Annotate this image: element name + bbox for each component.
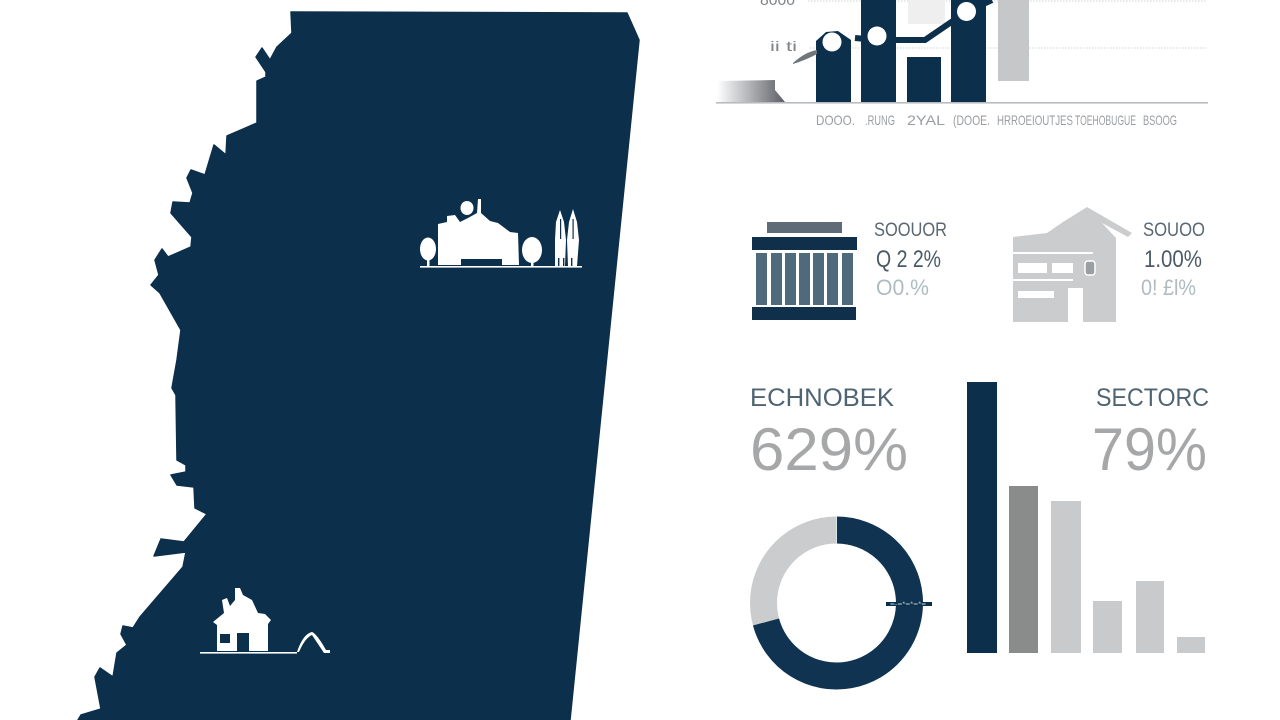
chart: top bar and line chart	[716, 0, 1208, 128]
chart x axis labels: BSOOG	[1143, 112, 1177, 128]
chart x axis labels: .RUNG	[865, 112, 895, 128]
stat: left headline: ECHNOBEK	[750, 384, 894, 412]
stat block: building: SOOUOR	[874, 220, 947, 241]
stat: right headline: 79%	[1092, 416, 1207, 483]
bar chart: sectors	[967, 382, 1205, 653]
chart x axis labels: 2YAL	[907, 112, 945, 128]
chart x axis labels	[816, 112, 1177, 128]
panel: map silhouette	[78, 12, 639, 720]
chart x axis labels: DOOO.	[816, 112, 855, 128]
chart y axis labels	[760, 0, 797, 54]
stat block: building: O0.%	[876, 275, 929, 300]
chart bars	[816, 0, 986, 102]
stat: right headline: SECTORC	[1096, 384, 1209, 412]
stat: left headline: 629%	[750, 416, 908, 483]
donut tiny label: =-=*=*=*=	[890, 602, 927, 608]
stat: left headline	[750, 384, 908, 483]
stat block: building	[874, 220, 947, 300]
stat block: house	[1141, 220, 1205, 300]
icon: cathedral and trees	[420, 199, 582, 268]
decorative gradient shape	[717, 80, 785, 102]
icon: cottage and hill	[200, 588, 330, 654]
stat block: building: Q 2 2%	[876, 246, 941, 273]
trend line with markers	[822, 0, 992, 52]
chart y axis labels: ii ti	[770, 38, 797, 54]
stat block: house: SOUOO	[1143, 220, 1205, 241]
stat: right headline	[1092, 384, 1209, 483]
chart x axis labels: TOEHOBUGUE	[1075, 112, 1136, 128]
chart x axis labels: (DOOE.	[953, 112, 990, 128]
icon: grey house	[1013, 207, 1132, 322]
donut chart	[764, 516, 932, 676]
chart x axis labels: HRROEIOUTJES	[997, 112, 1073, 128]
stat block: house: 1.00%	[1144, 246, 1202, 273]
donut tiny label	[886, 602, 932, 608]
icon: column building	[752, 222, 857, 320]
stat block: house: 0! £l%	[1141, 275, 1196, 300]
